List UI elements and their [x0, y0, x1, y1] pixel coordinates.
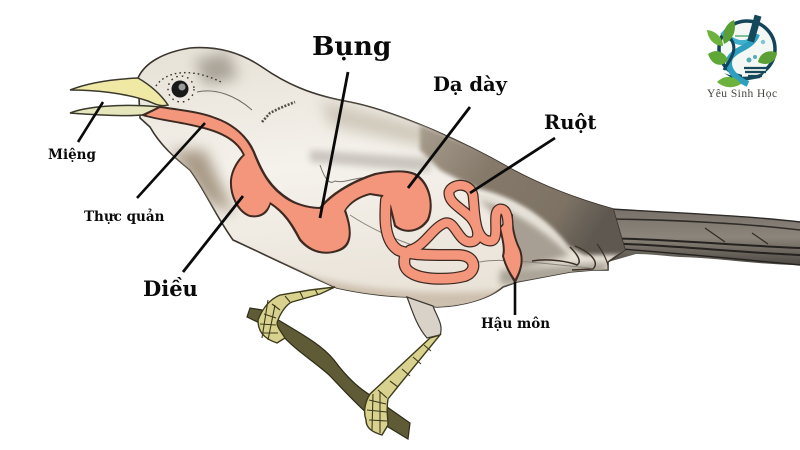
label: Thực quản: Thực quản	[84, 209, 165, 225]
logo text: Yêu Sinh Học	[707, 88, 778, 100]
upper leg left	[258, 287, 335, 343]
label: Ruột: Ruột	[544, 111, 596, 134]
thigh	[407, 297, 441, 338]
label: Dạ dày: Dạ dày	[433, 73, 508, 96]
label: Hậu môn: Hậu môn	[481, 316, 550, 332]
upper beak	[70, 78, 168, 106]
body shading	[170, 52, 630, 310]
upper leg right	[365, 335, 440, 435]
label: Miệng: Miệng	[48, 147, 96, 163]
label: Dạ dày	[408, 73, 508, 188]
digestive tract	[143, 107, 522, 282]
lower beak	[70, 105, 160, 116]
tail feathers	[585, 209, 800, 265]
eye	[168, 76, 194, 102]
label: Bụng	[312, 31, 391, 218]
legs	[247, 287, 441, 439]
label: Diều: Diều	[143, 276, 198, 301]
eye ring	[156, 73, 223, 86]
logo emblem	[707, 15, 777, 87]
body	[138, 48, 625, 307]
logo: Yêu Sinh Học	[707, 15, 778, 100]
label: Diều	[143, 196, 243, 301]
tract outline	[143, 107, 522, 282]
label: Hậu môn	[481, 282, 550, 332]
branch	[247, 308, 410, 439]
label: Miệng	[48, 102, 103, 163]
tract fill	[146, 108, 521, 279]
label: Ruột	[470, 111, 596, 193]
label: Bụng: Bụng	[312, 31, 391, 62]
illustration: bird	[70, 48, 800, 439]
label: Thực quản	[84, 123, 205, 225]
